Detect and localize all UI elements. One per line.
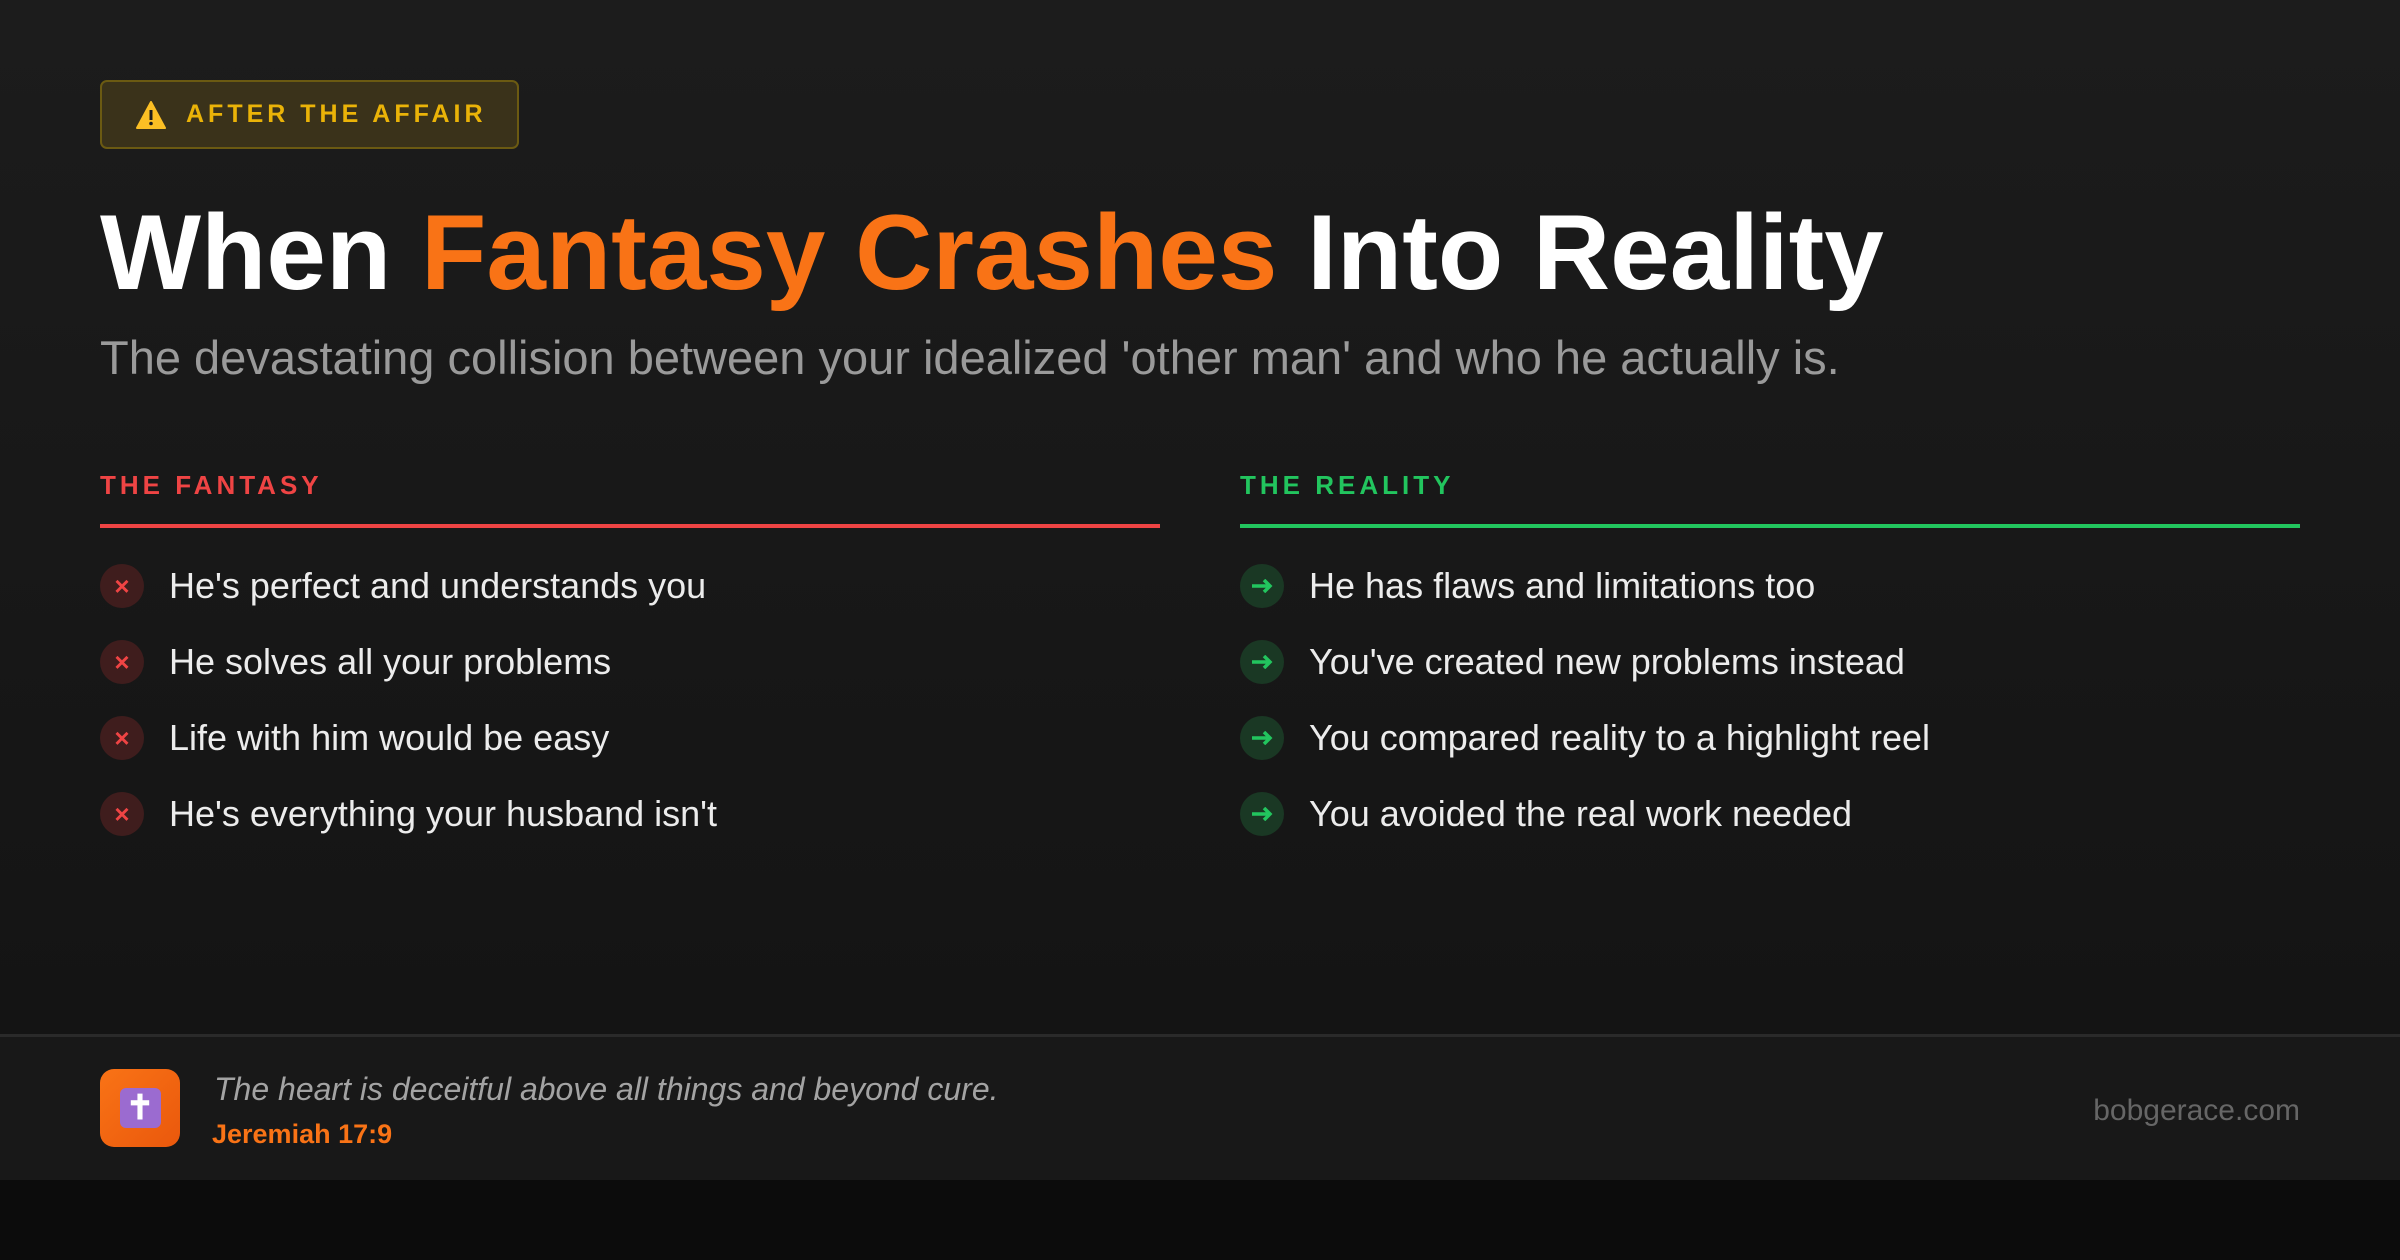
panel: reality: THE REALITY xyxy=(1240,470,1454,500)
footer xyxy=(0,1034,2400,1180)
badge: AFTER THE AFFAIR xyxy=(186,100,487,128)
item: Life with him would be easy xyxy=(169,717,609,758)
subtitle: The devastating collision between your idealized 'other man' and who he actually is. xyxy=(100,331,1840,384)
badge xyxy=(100,80,519,149)
site: bobgerace.com xyxy=(2093,1094,2300,1127)
item: He has flaws and limitations too xyxy=(1309,565,1815,606)
item: You compared reality to a highlight reel xyxy=(1309,717,1930,758)
title: When Fantasy Crashes Into Reality xyxy=(100,192,1884,312)
icon: cross xyxy=(100,1069,180,1147)
panel: fantasy xyxy=(100,470,1160,836)
quote: The heart is deceitful above all things and beyond cure. xyxy=(214,1071,998,1107)
item: × xyxy=(114,646,130,676)
reference: Jeremiah 17:9 xyxy=(212,1119,392,1149)
panel: reality xyxy=(1240,470,2300,836)
item: He solves all your problems xyxy=(169,641,611,682)
item: He's perfect and understands you xyxy=(169,565,706,606)
item: You've created new problems instead xyxy=(1309,641,1905,682)
item: × xyxy=(114,798,130,828)
item: You avoided the real work needed xyxy=(1309,793,1852,834)
item: × xyxy=(114,722,130,752)
item: × xyxy=(114,570,130,600)
panel: fantasy: THE FANTASY xyxy=(100,470,323,500)
item: He's everything your husband isn't xyxy=(169,793,717,834)
icon: cross: ✝ xyxy=(126,1089,154,1127)
